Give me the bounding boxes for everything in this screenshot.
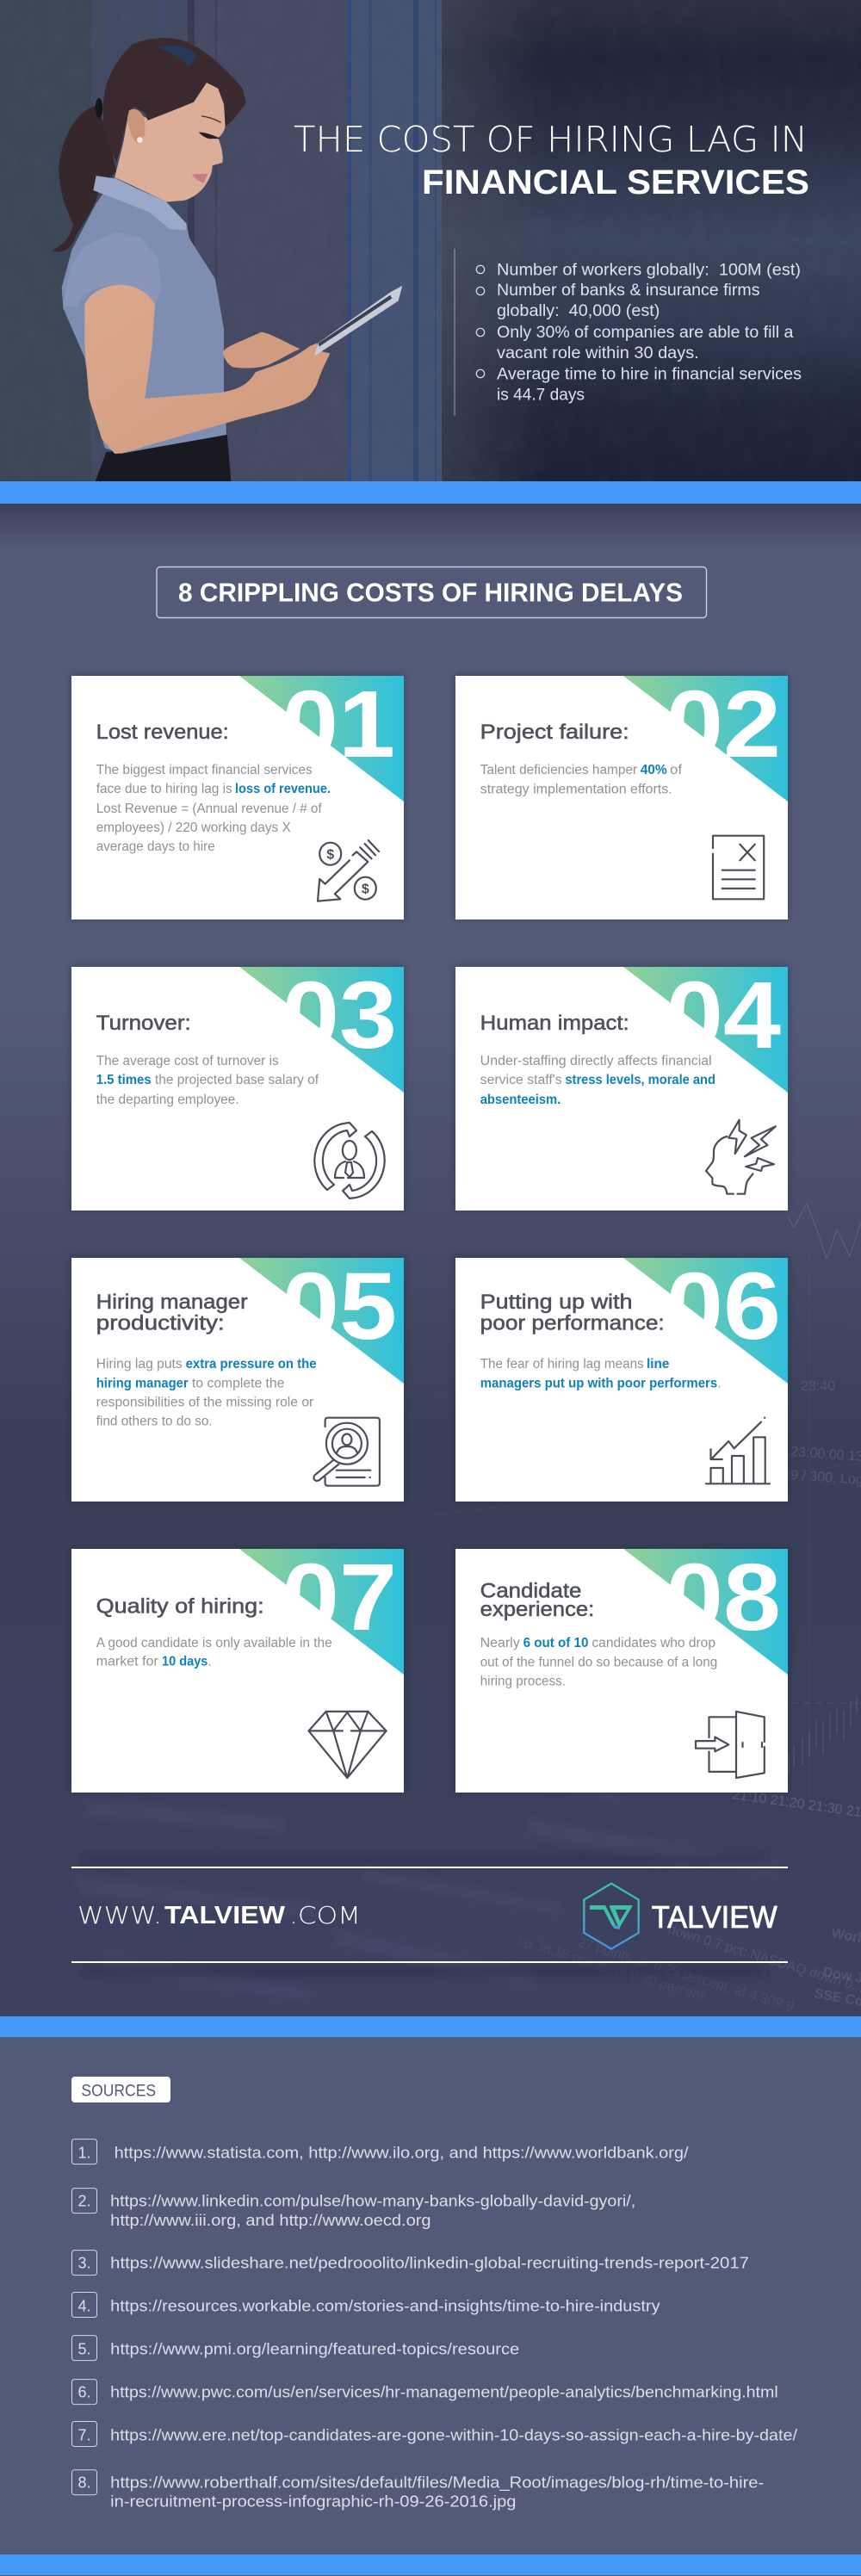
skirt [96, 429, 231, 481]
bullet 2: Number of banks & insurance firms [497, 282, 759, 300]
card 07 body text [96, 1636, 332, 1669]
card 06 title: Putting up with [480, 1291, 632, 1314]
icon: falling money arrow: $ [362, 882, 369, 897]
card 04 body text [480, 1054, 715, 1107]
website url: TALVIEW [164, 1902, 286, 1929]
sleeve [63, 232, 161, 307]
card 01: lost revenue [71, 672, 404, 920]
card 06 title: poor performance: [480, 1312, 665, 1334]
card 04: human impact: Human impact: [480, 1012, 629, 1035]
faint trading screen backdrop [77, 1204, 861, 2015]
neck and face [115, 83, 226, 202]
card 01 body text: average days to hire [96, 839, 215, 854]
card 04: human impact [455, 963, 788, 1211]
card 07 body text: . [208, 1655, 212, 1669]
card 05 body text: hiring manager [96, 1377, 189, 1391]
icon: magnifier over resume [313, 1418, 380, 1486]
website url: WWW. [77, 1901, 162, 1929]
card 05 body text: extra pressure on the [186, 1357, 317, 1372]
source 8 [72, 2470, 764, 2511]
eye [199, 132, 221, 139]
bullet 3: vacant role within 30 days. [497, 344, 699, 362]
faint trading screen backdrop: up 38.18 points, or 0.30 percent [516, 1934, 706, 2004]
card 08 body text: 6 out of 10 [523, 1636, 588, 1650]
bullet 2 [476, 282, 759, 320]
hero title: THE COST OF HIRING LAG IN [294, 119, 808, 160]
source 5: 5. [77, 2340, 91, 2357]
card 06: putting up with poor performance: 06 [666, 1254, 781, 1359]
bullet 1: Number of workers globally: 100M (est) [497, 262, 801, 280]
card 06: putting up with poor performance [455, 1254, 788, 1502]
card 06 body text: . [717, 1377, 722, 1391]
source 2: 2. [77, 2193, 91, 2210]
card 05: hiring manager productivity: 05 [282, 1254, 397, 1359]
lips [192, 174, 208, 183]
source 7: 7. [77, 2426, 91, 2443]
card 07: quality of hiring: 07 [282, 1545, 397, 1650]
card 05: hiring manager productivity [71, 1254, 404, 1502]
source 3: https://www.slideshare.net/pedrooolito/linkedin-global-recruiting-trends-report-2017 [110, 2255, 749, 2272]
website url: .COM [289, 1901, 361, 1929]
ponytail [52, 106, 116, 252]
hero panel [0, 0, 861, 481]
card 03 body text: 1.5 times [96, 1073, 152, 1087]
card 01: lost revenue: Lost revenue: [96, 721, 229, 744]
icon: door with entry arrow [696, 1712, 765, 1778]
card 07: quality of hiring [71, 1545, 404, 1793]
back hand [222, 332, 300, 368]
card 05 body text: responsibilities of the missing role or [96, 1395, 313, 1410]
blue band top [0, 481, 861, 504]
source 2 [72, 2189, 635, 2229]
card 06 body text: managers put up with poor performers [480, 1377, 717, 1391]
hair tie [96, 98, 102, 118]
card 08 title: Candidate [480, 1580, 581, 1603]
source 7: https://www.ere.net/top-candidates-are-gone-within-10-days-so-assign-each-a-hire-by-date/ [110, 2426, 797, 2443]
card 08: candidate experience: 08 [666, 1545, 781, 1650]
bullet 4 [476, 365, 802, 405]
card 02 body text: of [670, 763, 683, 777]
bullet 3 [476, 324, 794, 362]
faint trading screen backdrop: down 0.7 pct; NASDAQ down 0... [666, 1923, 861, 1996]
card 06 title [480, 1291, 665, 1334]
card 08: candidate experience [455, 1545, 788, 1793]
card 05 title [96, 1291, 248, 1334]
card 03 body text: The average cost of turnover is [96, 1054, 279, 1068]
sources panel [0, 2037, 861, 2554]
icon: head with lightning bolts [706, 1120, 776, 1194]
bullet 4: Average time to hire in financial services [497, 365, 802, 384]
source 1: https://www.statista.com, http://www.ilo.org, and https://www.worldbank.org/ [115, 2144, 689, 2161]
card 04 body text: absenteeism. [480, 1093, 561, 1107]
card 02: project failure [455, 672, 788, 920]
talview logo [584, 1884, 777, 1949]
bullet 3: Only 30% of companies are able to fill a [497, 324, 794, 342]
source 2: https://www.linkedin.com/pulse/how-many-banks-globally-david-gyori/, [110, 2193, 635, 2210]
icon: falling money arrow [318, 840, 379, 901]
card 08 body text [480, 1636, 717, 1689]
source 6: https://www.pwc.com/us/en/services/hr-management/people-analytics/benchmarking.html [110, 2384, 778, 2401]
card 03: turnover: 03 [282, 963, 397, 1068]
card 02 body text: 40% [641, 763, 667, 777]
icon: person in rotation arrows [314, 1123, 385, 1198]
tablet [314, 286, 402, 356]
card 06 body text: line [647, 1357, 670, 1372]
photo: woman using tablet [52, 38, 402, 481]
card 05 body text: find others to do so. [96, 1414, 213, 1429]
card 02: project failure: 02 [666, 672, 781, 777]
blue band bottom [0, 2554, 861, 2575]
card 03: turnover: Turnover: [96, 1012, 191, 1035]
card 07 body text: A good candidate is only available in the [96, 1636, 332, 1650]
card 08 body text: candidates who drop [592, 1636, 715, 1650]
card 04 body text: Under-staffing directly affects financial [480, 1054, 712, 1068]
collar [93, 176, 187, 230]
card 03 body text: the departing employee. [96, 1093, 239, 1107]
card 03 body text [96, 1054, 319, 1107]
card 08 body text: Nearly [480, 1636, 520, 1650]
hero title [294, 119, 809, 201]
hair [103, 38, 246, 163]
hero stats list [455, 249, 802, 416]
shirt [62, 177, 226, 454]
talview logo: TALVIEW [652, 1899, 777, 1935]
source 6: 6. [77, 2384, 91, 2401]
source 3 [72, 2251, 749, 2276]
earring [137, 137, 143, 143]
card 06 body text [480, 1357, 722, 1391]
source 8: https://www.roberthalf.com/sites/default/files/Media_Root/images/blog-rh/time-to-hire- [110, 2474, 764, 2492]
source 2: http://www.iii.org, and http://www.oecd.org [110, 2212, 431, 2229]
sources label [71, 2077, 170, 2102]
bullet 4: is 44.7 days [497, 387, 585, 405]
card 02 body text [480, 763, 683, 797]
icon: declining bar chart [706, 1418, 770, 1483]
card 03: turnover [71, 963, 404, 1211]
card 04 body text: service staff's [480, 1073, 562, 1087]
source 7 [72, 2421, 797, 2447]
footer brand strip [71, 1867, 788, 1963]
card 01: lost revenue: 01 [282, 672, 395, 777]
card 01 body text [96, 763, 331, 854]
source 5: https://www.pmi.org/learning/featured-topics/resource [110, 2340, 519, 2357]
source 1 [72, 2139, 689, 2164]
source 8: 8. [77, 2474, 91, 2492]
card 04 body text: stress levels, morale and [565, 1073, 715, 1087]
section heading: 8 crippling costs: 8 CRIPPLING COSTS OF HIRING DELAYS [178, 578, 683, 608]
card 08 body text: out of the funnel do so because of a long [480, 1656, 717, 1670]
section heading: 8 crippling costs [157, 567, 706, 618]
ear [127, 109, 145, 143]
card 01 body text: face due to hiring lag is [96, 782, 232, 796]
blue band middle [0, 2016, 861, 2037]
card 08 title: experience: [480, 1598, 594, 1621]
source 1: 1. [77, 2144, 91, 2161]
card 05 body text [96, 1357, 317, 1429]
card 07: quality of hiring: Quality of hiring: [96, 1595, 264, 1619]
arm and hands [84, 285, 330, 454]
card 01 body text: loss of revenue. [235, 782, 331, 796]
card 02 body text: Talent deficiencies hamper [480, 763, 637, 777]
card 02: project failure: Project failure: [480, 721, 629, 744]
hero title: FINANCIAL SERVICES [422, 164, 809, 201]
source 5 [72, 2336, 519, 2361]
card 03 body text: the projected base salary of [155, 1073, 319, 1087]
source 4: https://resources.workable.com/stories-and-insights/time-to-hire-industry [110, 2297, 660, 2314]
faint trading screen backdrop: 23:40 [801, 1379, 835, 1394]
main section background with faint trading chart [0, 504, 861, 2016]
card 04: human impact: 04 [666, 963, 781, 1068]
source 6 [72, 2380, 778, 2405]
card 01 body text: employees) / 220 working days X [96, 820, 291, 835]
card 08 body text: hiring process. [480, 1674, 566, 1689]
bullet 2: globally: 40,000 (est) [497, 302, 660, 320]
source 4: 4. [77, 2297, 91, 2314]
source 3: 3. [77, 2255, 91, 2272]
icon: failed document [713, 836, 764, 899]
icon: diamond [308, 1712, 387, 1778]
card 05 title: Hiring manager [96, 1291, 248, 1314]
website url [77, 1901, 361, 1929]
card 05 body text: to complete the [192, 1377, 284, 1391]
sources label: SOURCES [81, 2082, 156, 2100]
card 07 body text: market for [96, 1655, 158, 1669]
source 4 [72, 2292, 660, 2318]
card 05 body text: Hiring lag puts [96, 1357, 183, 1372]
card 02 body text: strategy implementation efforts. [480, 783, 672, 797]
card 06 body text: The fear of hiring lag means [480, 1357, 644, 1372]
card 01 body text: The biggest impact financial services [96, 763, 313, 777]
icon: falling money arrow: $ [326, 847, 334, 863]
source 8: in-recruitment-process-infographic-rh-09-26-2016.jpg [110, 2493, 516, 2511]
card 08 title [480, 1580, 594, 1621]
hero background wall [0, 0, 861, 481]
card 01 body text: Lost Revenue = (Annual revenue / # of [96, 802, 322, 816]
card 07 body text: 10 days [162, 1655, 208, 1669]
card 05 title: productivity: [96, 1312, 225, 1334]
faint trading screen backdrop: 27 points, or 0.29 percent, at 4,309.9 [576, 1935, 796, 2015]
